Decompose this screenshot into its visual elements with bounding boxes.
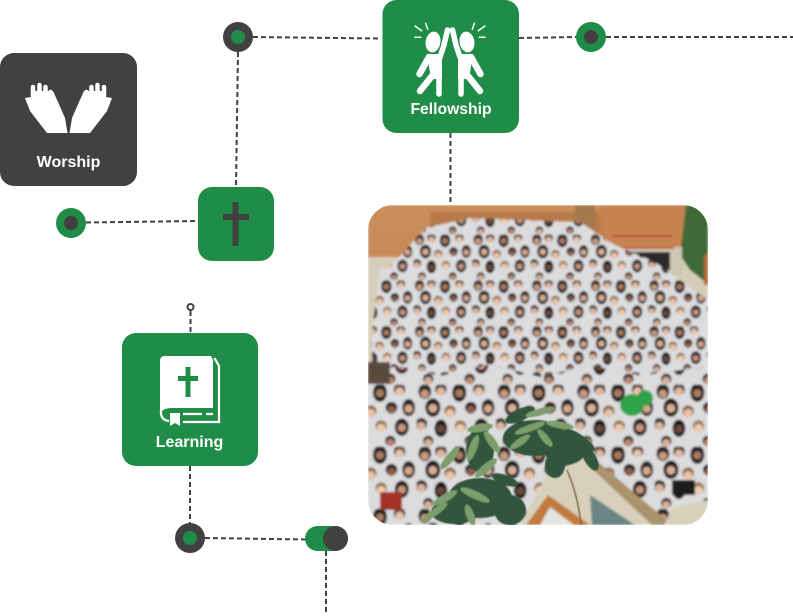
icon: bible (160, 356, 219, 426)
node: top right green dot (576, 22, 606, 52)
icon: raised hands (25, 85, 112, 133)
node: top dark dot (223, 22, 253, 52)
toggle pill (305, 526, 348, 551)
label: fellowship: Fellowship (410, 101, 492, 118)
node: bottom dark dot (175, 523, 205, 553)
panel: worship (0, 53, 137, 186)
node: small ring (188, 304, 194, 310)
panel: learning (122, 333, 258, 466)
icon: cross (223, 202, 249, 246)
plant (421, 403, 602, 527)
photo: group photo of attendees (368, 205, 708, 527)
panel: cross (198, 187, 274, 261)
stairs and floor (520, 458, 652, 525)
icon: high five figures (415, 23, 485, 94)
label: worship: Worship (37, 154, 101, 171)
node: left green dot (56, 208, 86, 238)
label: learning: Learning (156, 434, 223, 451)
panel: fellowship (382, 0, 519, 133)
